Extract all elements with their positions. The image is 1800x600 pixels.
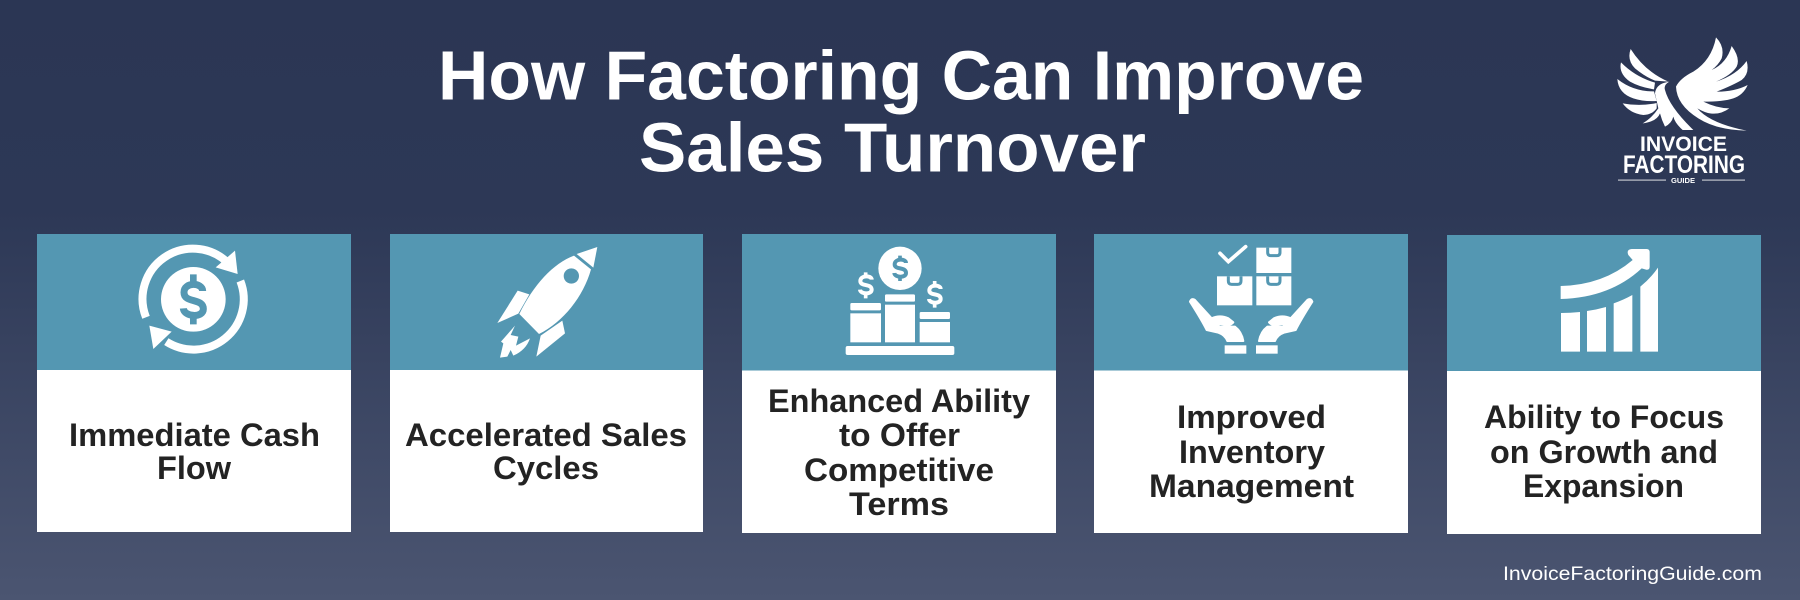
panel header band bbox=[37, 234, 351, 370]
logo wordmark: FACTORING bbox=[1623, 151, 1745, 179]
panel body bbox=[37, 234, 351, 532]
label: Terms bbox=[849, 486, 949, 522]
panel: Immediate Cash Flow bbox=[37, 234, 351, 532]
panel body bbox=[390, 234, 703, 532]
label bbox=[768, 383, 1030, 522]
icon: dollar with circular arrows bbox=[143, 249, 244, 350]
label: Flow bbox=[157, 450, 232, 486]
title: How Factoring Can Improve bbox=[438, 36, 1364, 114]
panel header band bbox=[1447, 235, 1761, 371]
label: Accelerated Sales bbox=[405, 417, 687, 453]
label bbox=[1149, 399, 1354, 504]
panel: Enhanced Ability to Offer Competitive Terms bbox=[742, 234, 1056, 533]
label: Ability to Focus bbox=[1484, 399, 1724, 435]
panel: Improved Inventory Management bbox=[1094, 234, 1408, 533]
icon: coin podium bbox=[846, 247, 954, 355]
panel body bbox=[1094, 234, 1408, 533]
label bbox=[405, 417, 687, 486]
label: on Growth and bbox=[1490, 434, 1718, 470]
label: Inventory bbox=[1179, 434, 1325, 470]
title bbox=[438, 36, 1364, 186]
icon: rocket bbox=[497, 247, 597, 358]
label: Enhanced Ability bbox=[768, 383, 1030, 419]
label bbox=[1484, 399, 1724, 504]
panel: Ability to Focus on Growth and Expansion bbox=[1447, 235, 1761, 534]
panel body bbox=[742, 234, 1056, 533]
label: Expansion bbox=[1523, 468, 1684, 504]
logo wordmark bbox=[1618, 133, 1745, 185]
panel body bbox=[1447, 235, 1761, 534]
panel header band bbox=[742, 234, 1056, 370]
logo: Invoice Factoring Guide bbox=[1617, 37, 1748, 185]
panel header band bbox=[390, 234, 703, 370]
label: Competitive bbox=[804, 452, 994, 488]
label: Cycles bbox=[493, 450, 599, 486]
panel: Accelerated Sales Cycles bbox=[390, 234, 703, 532]
label: Immediate Cash bbox=[69, 417, 320, 453]
label bbox=[69, 417, 320, 486]
label: to Offer bbox=[839, 417, 960, 453]
icon: hands holding boxes bbox=[1190, 247, 1312, 354]
logo wordmark: INVOICE bbox=[1640, 133, 1727, 156]
logo wordmark: GUIDE bbox=[1671, 178, 1695, 185]
icon: eagle bbox=[1617, 37, 1748, 131]
footer website: InvoiceFactoringGuide.com bbox=[1503, 563, 1762, 585]
label: Management bbox=[1149, 468, 1354, 504]
title: Sales Turnover bbox=[639, 108, 1146, 186]
icon: rising bar chart with arrow bbox=[1561, 249, 1658, 352]
panel header band bbox=[1094, 234, 1408, 370]
label: Improved bbox=[1177, 399, 1326, 435]
